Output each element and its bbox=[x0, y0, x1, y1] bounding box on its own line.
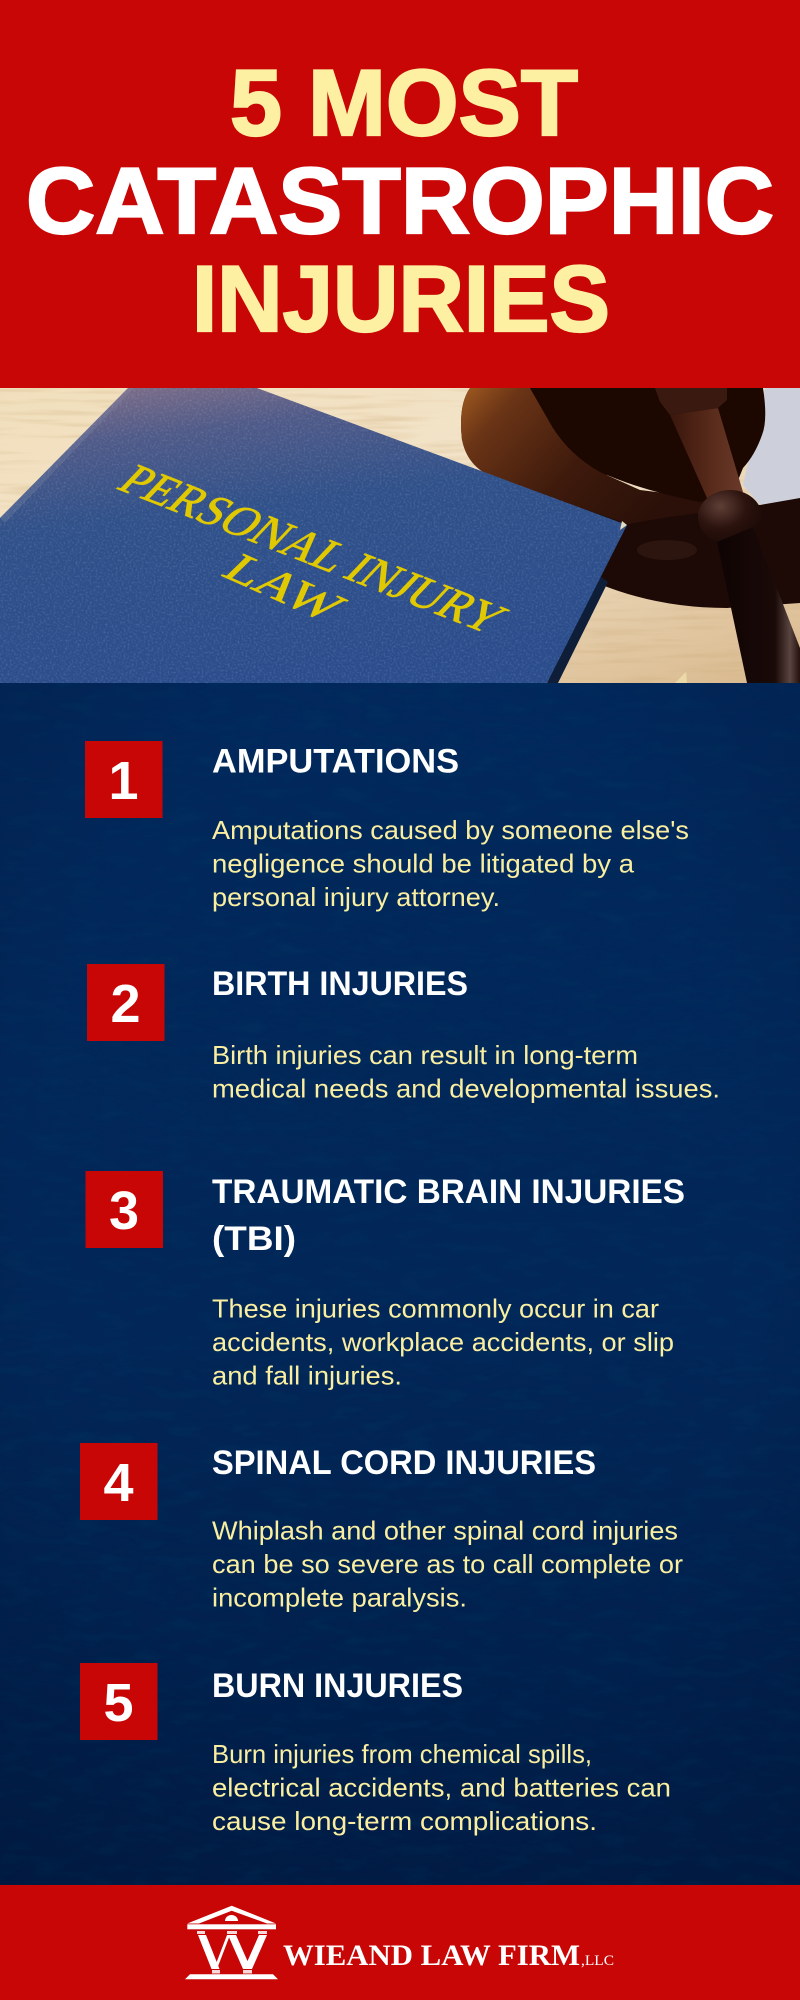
number badge 2 bbox=[87, 964, 164, 1041]
book title: PERSONAL INJURY: PERSONAL INJURY bbox=[107, 456, 518, 643]
body text: traumatic brain injuries bbox=[212, 1294, 674, 1390]
item 4: spinal cord injuries bbox=[80, 1443, 683, 1612]
body text: traumatic brain injuries: and fall injuries. bbox=[212, 1360, 402, 1390]
gavel handle bbox=[655, 388, 800, 683]
photo: law book and gavel bbox=[0, 388, 800, 683]
number badge 1: 1 bbox=[108, 751, 139, 811]
body text: birth injuries bbox=[212, 1040, 720, 1104]
header band bbox=[0, 0, 800, 388]
gavel sound block bbox=[461, 388, 800, 608]
item 5: burn injuries bbox=[80, 1663, 671, 1836]
item 3: traumatic brain injuries bbox=[86, 1171, 685, 1390]
body text: burn injuries: Burn injuries from chemical spills, bbox=[212, 1739, 592, 1769]
heading: burn injuries: BURN INJURIES bbox=[212, 1667, 463, 1705]
body text: burn injuries: electrical accidents, and batteries can bbox=[212, 1772, 671, 1802]
title line: 5 MOST: 5 MOST bbox=[230, 50, 578, 155]
body text: spinal cord injuries: can be so severe as to call complete or bbox=[212, 1549, 683, 1579]
number badge 4 bbox=[80, 1443, 158, 1520]
body text: amputations: negligence should be litigated by a bbox=[212, 848, 635, 878]
body text: traumatic brain injuries: These injuries commonly occur in car bbox=[212, 1294, 659, 1324]
body text: traumatic brain injuries: accidents, workplace accidents, or slip bbox=[212, 1327, 674, 1357]
book title: LAW: LAW bbox=[213, 545, 357, 630]
title line: INJURIES: INJURIES bbox=[192, 246, 610, 351]
body text: spinal cord injuries bbox=[212, 1516, 683, 1612]
body text: amputations: personal injury attorney. bbox=[212, 882, 500, 912]
item 1: amputations bbox=[85, 741, 689, 912]
number badge 1 bbox=[85, 741, 162, 818]
body text: burn injuries bbox=[212, 1739, 671, 1836]
body text: birth injuries: Birth injuries can result in long-term bbox=[212, 1040, 638, 1070]
number badge 3 bbox=[86, 1171, 163, 1248]
firm name: ,LLC bbox=[581, 1953, 614, 1969]
body text: burn injuries: cause long-term complications. bbox=[212, 1806, 597, 1836]
heading: traumatic brain injuries bbox=[212, 1173, 685, 1258]
heading: amputations: AMPUTATIONS bbox=[212, 742, 459, 780]
body text: spinal cord injuries: incomplete paralysis. bbox=[212, 1582, 467, 1612]
pen nib bbox=[675, 672, 687, 683]
body text: amputations bbox=[212, 815, 689, 912]
number badge 2: 2 bbox=[110, 974, 141, 1034]
heading: traumatic brain injuries: (TBI) bbox=[212, 1220, 296, 1258]
number badge 4: 4 bbox=[103, 1453, 134, 1513]
body text: spinal cord injuries: Whiplash and other spinal cord injuries bbox=[212, 1516, 678, 1546]
book cover bbox=[0, 388, 640, 683]
number badge 3: 3 bbox=[109, 1181, 139, 1241]
heading: traumatic brain injuries: TRAUMATIC BRAIN INJURIES bbox=[212, 1173, 685, 1211]
title line: CATASTROPHIC: CATASTROPHIC bbox=[26, 148, 774, 253]
item 2: birth injuries bbox=[87, 964, 720, 1104]
heading: spinal cord injuries: SPINAL CORD INJURIES bbox=[212, 1444, 596, 1482]
body text: amputations: Amputations caused by someone else's bbox=[212, 815, 689, 845]
number badge 5 bbox=[80, 1663, 158, 1740]
navy list panel bbox=[0, 683, 800, 1886]
number badge 5: 5 bbox=[103, 1673, 134, 1733]
body text: birth injuries: medical needs and developmental issues. bbox=[212, 1074, 720, 1104]
icon: law firm temple logo bbox=[185, 1906, 278, 1979]
heading: birth injuries: BIRTH INJURIES bbox=[212, 965, 468, 1003]
footer band bbox=[0, 1885, 800, 2000]
firm name: WIEAND LAW FIRM bbox=[283, 1939, 580, 1972]
